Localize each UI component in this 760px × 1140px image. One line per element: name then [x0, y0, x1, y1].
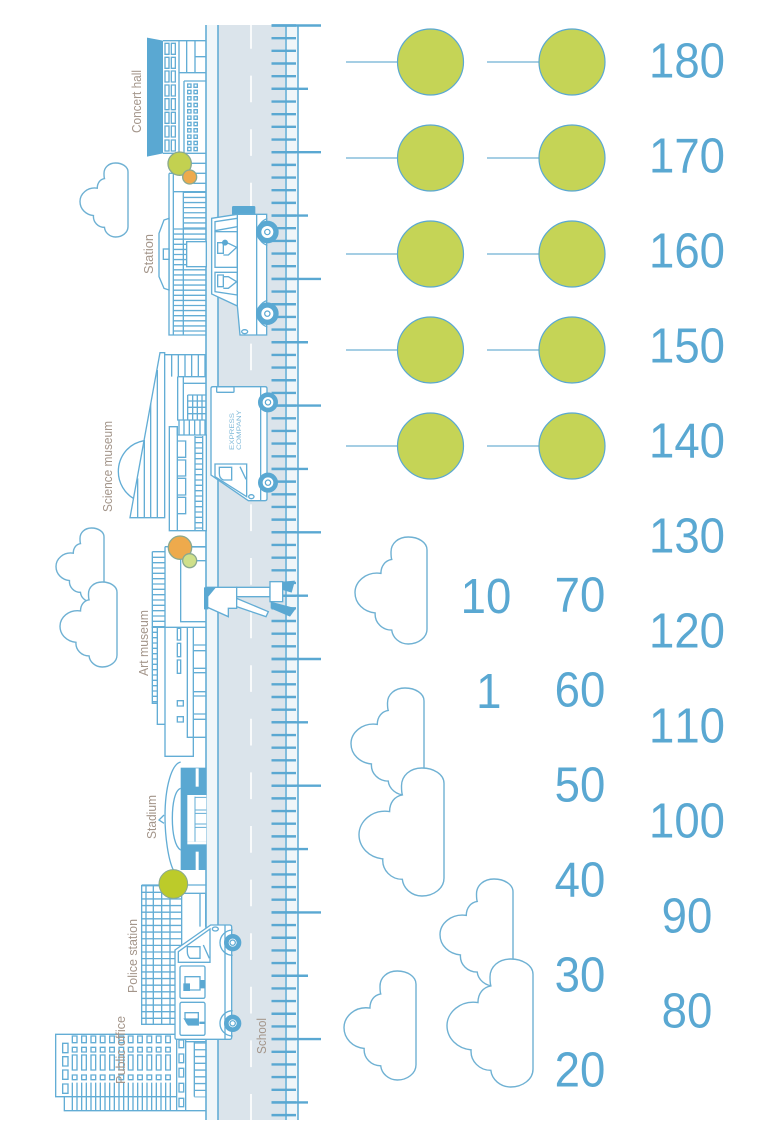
clouds: double left of art museum: [56, 528, 117, 667]
cloud: lower left: [344, 971, 416, 1080]
right column numbers 180 to 80: [649, 34, 725, 1039]
label: Station: Station: [141, 234, 156, 274]
markers column one: green circles with leader lines: [346, 29, 464, 479]
trees by the concert hall: [168, 152, 197, 184]
label: Concert hall: Concert hall: [129, 70, 144, 133]
tree by the police station: [159, 870, 188, 898]
right column numbers 180 to 80: 80: [662, 984, 712, 1039]
van text: EXPRESS COMPANY: EXPRESS: [229, 412, 236, 450]
middle column numbers 70 to 20: 30: [555, 948, 605, 1003]
building: station: [159, 163, 206, 335]
building: art museum: [152, 547, 206, 756]
label: Art museum: Art museum: [136, 610, 151, 676]
height ruler ticks: [272, 24, 321, 1117]
right column numbers 180 to 80: 160: [649, 224, 725, 279]
right column numbers 180 to 80: 90: [662, 889, 712, 944]
right column numbers 180 to 80: 110: [649, 699, 725, 754]
right column numbers 180 to 80: 100: [649, 794, 725, 849]
middle column numbers 70 to 20: [555, 568, 605, 1098]
cloud: beside the number 10: [355, 537, 427, 644]
building: police station: [142, 885, 206, 1024]
van text: EXPRESS COMPANY: COMPANY: [236, 409, 243, 450]
small numbers 10 and 1: 1: [476, 665, 501, 719]
cloud: small upper left: [80, 163, 128, 237]
building: science museum: [118, 353, 206, 531]
building: public office: [56, 1034, 206, 1111]
markers column two: green circles with leader lines: [487, 29, 605, 479]
person crossing the road: [204, 581, 296, 617]
label: Police station: Police station: [125, 919, 140, 993]
right column numbers 180 to 80: 170: [649, 129, 725, 184]
label: Public office: Public office: [113, 1016, 128, 1084]
clouds: double lower right: [440, 879, 533, 1087]
van: bottom with three passengers: [175, 925, 239, 1039]
middle column numbers 70 to 20: 50: [555, 758, 605, 813]
clouds: double centre: [351, 688, 444, 896]
road with sidewalks: [206, 22, 298, 1120]
right column numbers 180 to 80: 180: [649, 34, 725, 89]
van text: EXPRESS COMPANY: [229, 409, 243, 450]
middle column numbers 70 to 20: 60: [555, 663, 605, 718]
middle column numbers 70 to 20: 20: [555, 1043, 605, 1098]
right column numbers 180 to 80: 140: [649, 414, 725, 469]
trees by the art museum: [168, 536, 197, 568]
building: concert hall: [147, 38, 206, 157]
right column numbers 180 to 80: 150: [649, 319, 725, 374]
van: top with two passengers: [212, 206, 276, 335]
building: stadium: [159, 762, 206, 870]
middle column numbers 70 to 20: 40: [555, 853, 605, 908]
right column numbers 180 to 80: 120: [649, 604, 725, 659]
small numbers 10 and 1: 10: [461, 570, 511, 624]
label: Stadium: Stadium: [144, 795, 159, 839]
van: express company: [211, 387, 276, 501]
small numbers 10 and 1: [461, 570, 511, 719]
middle column numbers 70 to 20: 70: [555, 568, 605, 623]
label: Science museum: Science museum: [100, 421, 115, 512]
right column numbers 180 to 80: 130: [649, 509, 725, 564]
label: School: School: [254, 1018, 269, 1054]
